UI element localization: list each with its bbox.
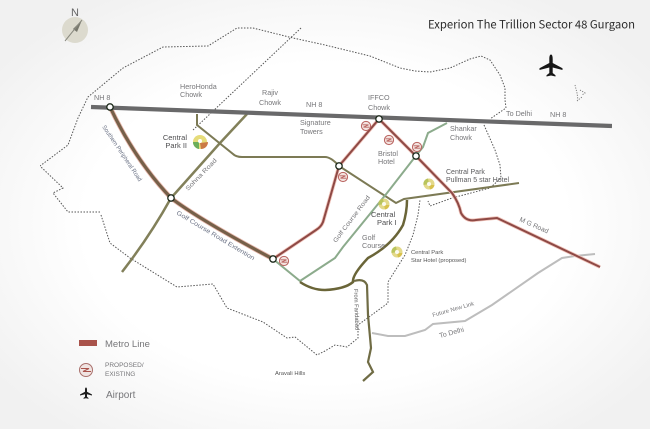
icon: Star Hotel (391, 246, 402, 258)
Southern Peripheral and Extension road (110, 107, 273, 259)
road and place labels: IFFCO (368, 93, 390, 102)
legend (79, 339, 150, 401)
title: Experion The Trillion Sector 48 Gurgaon (428, 16, 635, 32)
Central Park labels: Central Park (446, 169, 485, 176)
rotated road labels: Golf Course Road Extention (175, 210, 256, 262)
rotated road labels: From Faridabad (352, 289, 359, 330)
rotated road labels: M G Road (518, 216, 550, 236)
future new link: grey road (372, 254, 595, 336)
Central Park labels: Central (371, 210, 396, 219)
junction nodes (107, 104, 419, 262)
road and place labels: Hotel (378, 157, 395, 166)
road and place labels: Rajiv (262, 88, 278, 97)
Aravali Hills label: Aravali Hills (275, 371, 305, 377)
road and place labels: Towers (300, 127, 323, 136)
legend: proposed existing (80, 362, 144, 378)
rotated road labels: Southern Peripheral Road (100, 124, 143, 183)
Central Park labels: Park I (377, 218, 397, 227)
road and place labels: NH 8 (550, 110, 566, 119)
road and place labels: Chowk (368, 103, 390, 112)
metro station icons (279, 121, 422, 266)
road and place labels: Chowk (180, 90, 202, 99)
legend: proposed existing: EXISTING (105, 371, 135, 378)
icon: Central Park I (378, 198, 390, 210)
boundary: dotted east spur (428, 125, 501, 206)
rotated road labels: Sohna Road (184, 157, 219, 192)
rotated road labels (100, 124, 550, 340)
Sohna Road (122, 114, 247, 272)
legend: proposed existing: PROPOSED/ (105, 362, 144, 369)
rotated road labels: Golf Course Road (332, 194, 372, 244)
road and place labels: To Delhi (506, 109, 532, 118)
Star Hotel label: Central Park (411, 250, 443, 256)
boundary: dotted outline (40, 28, 506, 212)
rotated road labels: Future New Link (432, 301, 475, 319)
Star Hotel label: Star Hotel (proposed) (411, 258, 466, 264)
road and place labels: Chowk (450, 133, 472, 142)
Central Park labels: Park II (165, 141, 187, 150)
road and place labels: NH 8 (94, 93, 110, 102)
Star Hotel label (411, 250, 466, 264)
small scribble mark (575, 85, 585, 101)
dotted diagonal (193, 28, 301, 130)
road and place labels: Golf (362, 233, 375, 242)
Central Park labels (163, 133, 509, 227)
Central Park labels: Central (163, 133, 187, 142)
metro line (273, 119, 600, 267)
olive road: Golf Course to Faridabad (300, 200, 407, 290)
NH 8 highway (91, 107, 612, 126)
Central Park labels: Pullman 5 star Hotel (446, 177, 509, 184)
road and place labels: Course (362, 241, 385, 250)
rotated road labels: To Delhi (439, 327, 465, 340)
Golf Course Road green (273, 123, 447, 281)
road and place labels: Shankar (450, 124, 477, 133)
boundary: dotted lower outline (101, 200, 420, 355)
icon: north compass: N (71, 7, 79, 19)
icon: Central Park II (193, 135, 208, 149)
icon: airplane (540, 54, 562, 76)
From Faridabad road (354, 280, 373, 381)
road and place labels: HeroHonda (180, 82, 217, 91)
road and place labels: NH 8 (306, 100, 322, 109)
road and place labels: Chowk (259, 98, 281, 107)
road and place labels: Signature (300, 118, 331, 127)
legend: airport: Airport (106, 390, 136, 401)
icon: north compass (62, 7, 88, 43)
road and place labels: Bristol (378, 149, 398, 158)
olive road: Signature Towers to Pullman (197, 114, 519, 203)
road and place labels (94, 82, 566, 250)
icon: Pullman (423, 178, 434, 190)
legend: metro line: Metro Line (105, 339, 150, 350)
